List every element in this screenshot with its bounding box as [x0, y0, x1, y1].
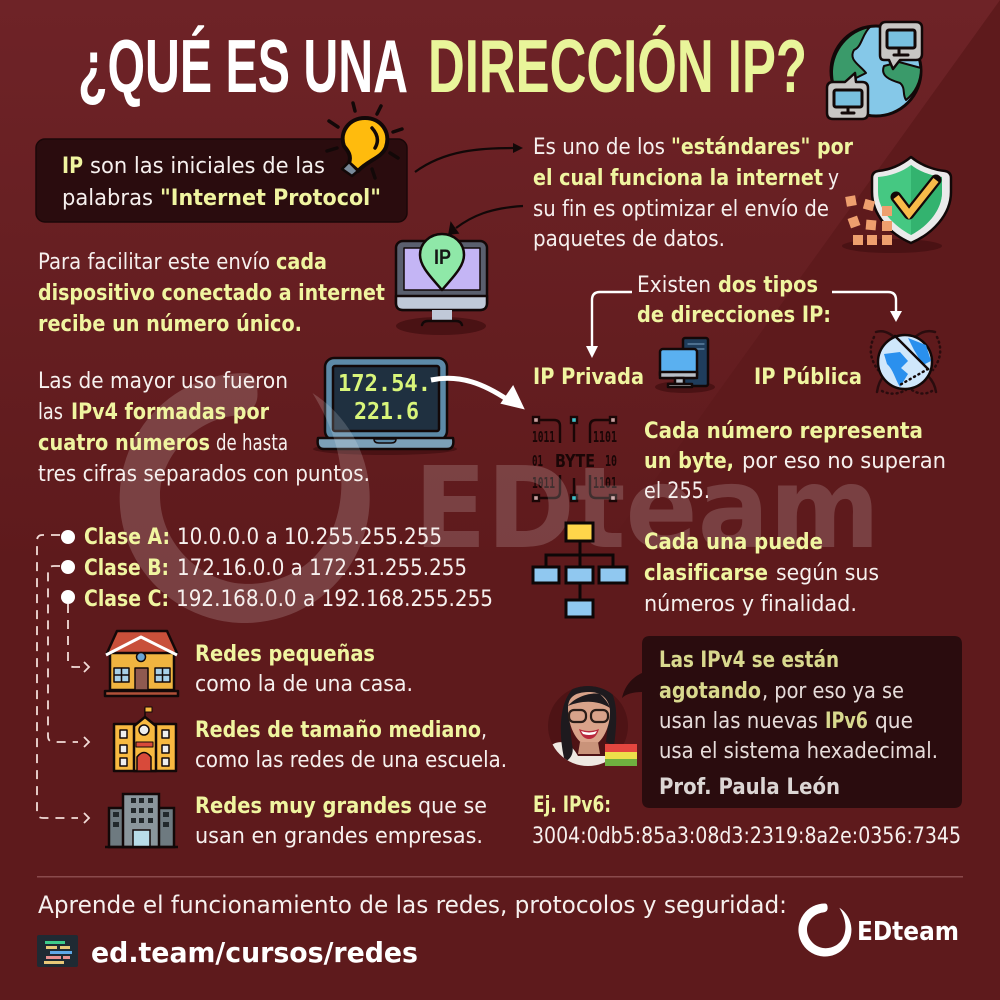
text: byte	[644, 419, 946, 504]
panel: IP definition	[36, 139, 407, 222]
icon: monitor with IP pin	[396, 234, 487, 335]
icon: monitor with IP pin: IP	[434, 246, 451, 269]
label: IP Privada: IP Privada	[533, 365, 644, 390]
text: IP initials	[62, 154, 381, 211]
panel: IPv6 callout	[622, 636, 962, 808]
callout text: usa el sistema hexadecimal.	[659, 739, 938, 764]
text: classification: Cada una puede	[644, 530, 823, 555]
arrow: to monitor	[449, 206, 523, 234]
watermark: EDteam	[120, 373, 880, 623]
icon: office building	[105, 794, 178, 847]
text: large networks	[195, 794, 487, 849]
text: unique number: Para facilitar este envío	[38, 250, 270, 275]
arrow: white curved to byte	[431, 378, 523, 408]
watermark: EDteam: EDteam	[414, 444, 880, 574]
icon: byte chip: 1101	[593, 428, 617, 446]
list: IP classes: Clase A:	[84, 525, 170, 550]
callout text: agotando	[659, 679, 761, 704]
text: IP initials: IP	[62, 154, 83, 179]
callout text	[659, 648, 938, 800]
text: IPv4: las	[38, 400, 63, 425]
text: byte: el 255.	[644, 479, 710, 504]
icon: light bulb	[327, 103, 402, 178]
footer url: ed.team/cursos/redes	[91, 936, 418, 969]
text: IPv6 example	[532, 793, 961, 849]
text: classification	[644, 530, 879, 617]
text: types of IP	[637, 273, 831, 328]
icon: code window	[37, 935, 78, 967]
callout text: IPv6	[825, 709, 868, 734]
label: IP Pública: IP Pública	[754, 365, 862, 390]
footer	[37, 876, 963, 969]
flag	[605, 744, 637, 766]
text: classification: números y finalidad.	[644, 592, 857, 617]
text: IPv4: tres cifras separados con puntos.	[38, 462, 370, 487]
text: IPv4: Las de mayor uso fueron	[38, 369, 288, 394]
icon: teacher avatar	[548, 686, 637, 766]
laptop screen numbers: 221.6	[354, 399, 419, 425]
callout text: , por eso ya se	[762, 679, 904, 704]
icon: public globe	[871, 331, 940, 394]
text: IPv4: de hasta	[216, 431, 288, 456]
text: unique number: recibe un número único.	[38, 312, 302, 337]
icon: byte chip: 1101	[593, 474, 617, 492]
text: types of IP: dos tipos	[718, 273, 818, 298]
dashed tree connecting classes	[37, 535, 89, 823]
text: large networks: usan en grandes empresas.	[195, 824, 483, 849]
icon: byte chip: 01	[532, 452, 543, 470]
icon: globe with computers	[827, 22, 922, 119]
list: IP classes: Clase B:	[84, 556, 169, 581]
text: medium networks: Redes de tamaño mediano	[195, 718, 481, 743]
footer call to action: Aprende el funcionamiento de las redes, protocolos y seguridad:	[38, 891, 787, 919]
icon: desktop computer	[655, 338, 715, 393]
callout text: usan las nuevas	[659, 709, 818, 734]
text: unique number	[38, 250, 385, 337]
text: small networks	[195, 642, 413, 697]
text: types of IP: de direcciones IP:	[637, 303, 831, 328]
text: byte: un byte,	[644, 449, 734, 474]
arrow: to private IP	[586, 292, 632, 358]
text: small networks: como la de una casa.	[195, 672, 413, 697]
icon: byte chip: BYTE	[555, 451, 595, 472]
icon: laptop	[313, 358, 457, 455]
icon: byte chip: 1011	[532, 428, 555, 446]
text: standards: y	[828, 166, 839, 191]
text: byte: Cada número representa	[644, 419, 923, 444]
title: ¿QUÉ ES UNA	[78, 24, 408, 108]
callout text: que	[875, 709, 913, 734]
text: standards: Es uno de los	[533, 135, 665, 160]
icon: house	[105, 631, 178, 696]
icon: school	[114, 707, 176, 771]
text: large networks: que se	[418, 794, 487, 819]
text: standards: "estándares" por	[671, 135, 853, 160]
logo: EDteam: EDteam	[857, 917, 959, 947]
list: IP classes	[61, 525, 493, 612]
text: standards: paquetes de datos.	[533, 227, 725, 252]
text: classification: según sus	[776, 561, 879, 586]
laptop screen numbers: 172.54.	[338, 371, 431, 397]
text: IP initials: "Internet Protocol"	[160, 186, 381, 211]
text: classification: clasificarse	[644, 561, 768, 586]
icon: byte chip: 1011	[532, 474, 555, 492]
callout text: Las IPv4 se están	[659, 648, 839, 673]
text: IPv4: IPv4 formadas por	[71, 400, 269, 425]
list: IP classes: 10.0.0.0 a 10.255.255.255	[177, 525, 442, 550]
icon: byte chip	[532, 417, 617, 501]
list: IP classes: Clase C:	[84, 587, 169, 612]
text: IPv6 example: Ej. IPv6:	[533, 793, 611, 818]
text: large networks: Redes muy grandes	[195, 794, 412, 819]
text: unique number: dispositivo conectado a internet	[38, 281, 385, 306]
text: IP initials: palabras	[62, 186, 153, 211]
text: standards: el cual funciona la internet	[533, 166, 823, 191]
arrow: to standards text	[415, 143, 523, 172]
title: DIRECCIÓN IP?	[428, 24, 807, 108]
text: IPv4	[38, 369, 370, 487]
text: medium networks: como las redes de una escuela.	[195, 748, 507, 773]
list: IP classes: 172.16.0.0 a 172.31.255.255	[177, 556, 467, 581]
text: small networks: Redes pequeñas	[195, 642, 375, 667]
arrow: to public IP	[832, 292, 902, 322]
text: IP initials: son las iniciales de las	[90, 154, 325, 179]
icon: byte chip: 10	[605, 452, 617, 470]
text: standards: su fin es optimizar el envío de	[533, 197, 829, 222]
icon: organization chart	[533, 523, 627, 617]
list: IP classes: 192.168.0.0 a 192.168.255.255	[176, 587, 493, 612]
text: medium networks	[195, 718, 507, 773]
logo: EDteam	[798, 903, 959, 956]
text: byte: por eso no superan	[742, 449, 946, 474]
text: types of IP: Existen	[637, 273, 711, 298]
text: unique number: cada	[276, 250, 327, 275]
text: medium networks: ,	[481, 718, 487, 743]
callout text: Prof. Paula León	[659, 775, 840, 800]
text: IPv4: cuatro números	[38, 431, 210, 456]
laptop screen numbers	[338, 371, 431, 425]
text: standards	[533, 135, 853, 252]
icon: shield with data packets	[842, 157, 951, 253]
